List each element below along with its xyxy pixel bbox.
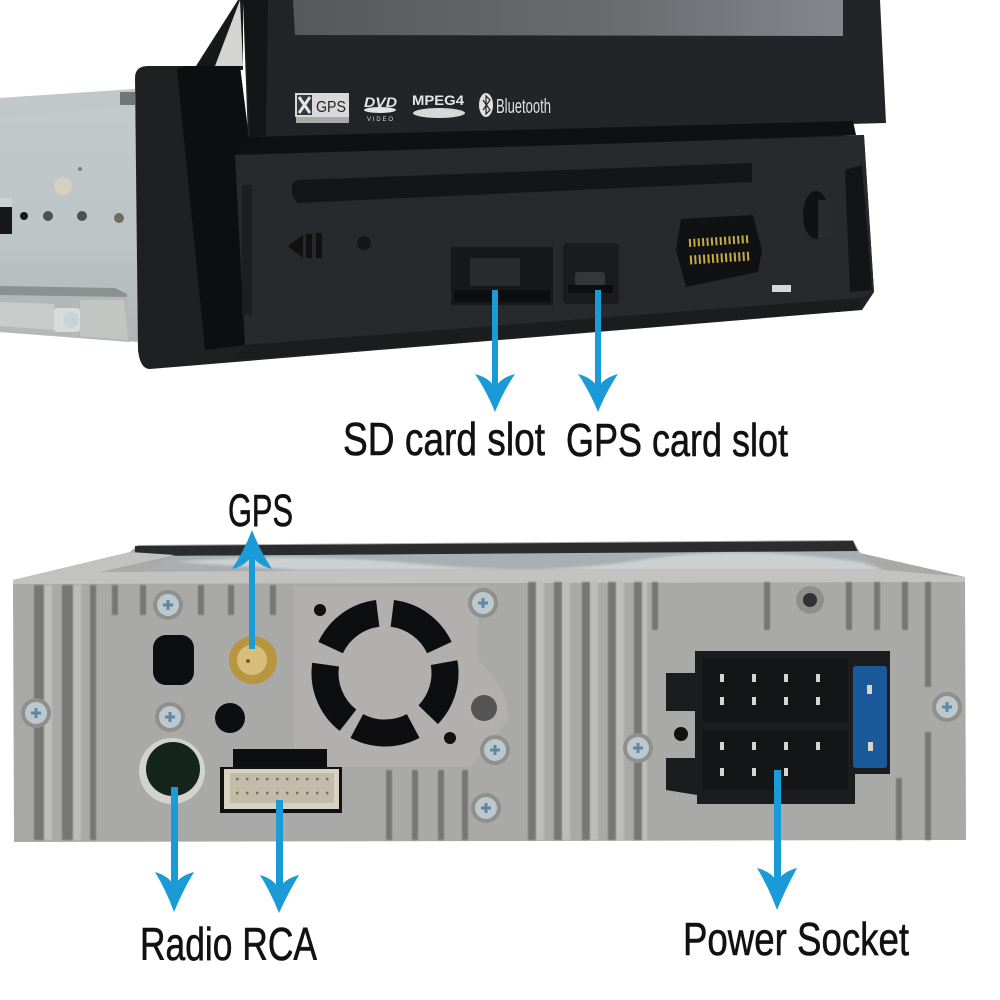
logo: MPEG4 xyxy=(412,92,465,118)
logo: DVD xyxy=(364,94,397,123)
gold SMA connector xyxy=(229,636,277,684)
logo: DVD: DVD xyxy=(364,94,397,110)
fan plate xyxy=(294,586,508,767)
screws xyxy=(21,586,962,823)
disc slot xyxy=(292,163,752,203)
label: Radio RCA: Radio RCA xyxy=(140,918,317,970)
round hole xyxy=(215,703,245,733)
top surface texture xyxy=(175,552,885,570)
metal chassis side xyxy=(0,89,139,342)
label: GPS antenna: GPS xyxy=(228,485,293,536)
label: Power Socket: Power Socket xyxy=(683,913,909,965)
arrow: SD card slot xyxy=(475,290,515,412)
GPS slot recess xyxy=(563,243,619,304)
arrow: RCA xyxy=(260,800,299,913)
radio socket xyxy=(139,738,205,804)
flip panel xyxy=(235,0,886,157)
arrow: Radio xyxy=(155,787,194,912)
black bezel xyxy=(135,66,874,369)
logo: GPS xyxy=(295,93,349,123)
logo: Bluetooth: Bluetooth xyxy=(496,96,551,118)
cooling fins xyxy=(34,582,931,840)
ribbon connector xyxy=(676,215,762,287)
arrow: GPS antenna xyxy=(232,530,272,649)
power socket xyxy=(666,651,890,804)
logo: MPEG4: MPEG4 xyxy=(412,92,464,108)
panel: front unit with flip-out screen xyxy=(0,0,886,369)
label: SD card slot: SD card slot xyxy=(343,413,545,465)
SD slot recess xyxy=(451,247,553,305)
pins xyxy=(720,674,873,776)
logo: GPS: GPS xyxy=(316,99,346,116)
front faceplate xyxy=(235,136,874,360)
white clip xyxy=(772,285,791,292)
fuse xyxy=(853,666,887,768)
side knob xyxy=(803,191,829,239)
rectangular port xyxy=(153,635,194,685)
arrow: GPS card slot xyxy=(578,290,618,412)
arrow: Power Socket xyxy=(757,770,797,910)
fan openings xyxy=(325,613,445,733)
eject mark xyxy=(288,233,322,258)
logo: DVD: VIDEO xyxy=(367,117,393,123)
rear housing xyxy=(13,540,966,842)
label: GPS card slot: GPS card slot xyxy=(566,414,788,466)
hinge arm xyxy=(196,0,243,70)
logo: Bluetooth xyxy=(479,93,551,118)
panel: rear unit xyxy=(13,540,966,842)
screen xyxy=(293,0,843,36)
RCA connector xyxy=(220,749,342,813)
